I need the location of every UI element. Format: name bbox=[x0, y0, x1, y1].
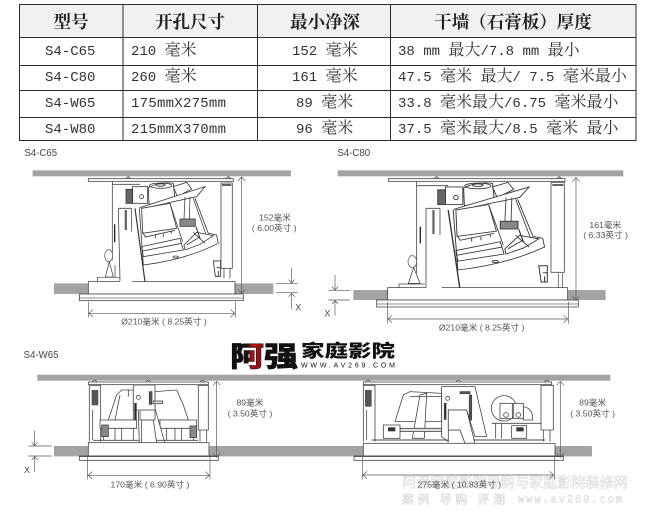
drywall thickness X: X bbox=[24, 465, 30, 475]
drywall thickness X: X bbox=[324, 308, 330, 318]
diagram: S4-C65 bbox=[24, 148, 301, 327]
height label bbox=[583, 219, 628, 240]
height label bbox=[228, 396, 272, 418]
drywall thickness X: X bbox=[295, 302, 301, 312]
height label: 89毫米 bbox=[236, 396, 264, 407]
height dimension bbox=[572, 178, 580, 300]
height label: ( 3.50英寸 ) bbox=[570, 407, 615, 418]
trim and flange bbox=[79, 282, 243, 301]
model label: S4-C65 bbox=[24, 148, 57, 159]
trim and flange bbox=[354, 443, 563, 460]
speaker drivers bbox=[93, 385, 198, 443]
model label: S4-C80 bbox=[337, 148, 370, 159]
drywall sections bbox=[353, 290, 606, 300]
height label: 161毫米 bbox=[589, 219, 622, 230]
table header background bbox=[19, 5, 636, 37]
table headers: 最小净深 bbox=[290, 12, 360, 32]
height label: 89毫米 bbox=[579, 396, 606, 407]
speaker frame bbox=[388, 177, 565, 288]
row: S4-W80 bbox=[45, 115, 619, 138]
drywall sections bbox=[54, 446, 592, 456]
row: S4-W80: 37.5 毫米最大/8.5 毫米 最小 bbox=[398, 115, 619, 138]
diagram: S4-W80 bbox=[354, 380, 628, 508]
speaker driver bbox=[438, 182, 548, 288]
ceiling bar bbox=[338, 170, 623, 176]
width dimension bbox=[362, 457, 554, 479]
model label: S4-W65 bbox=[24, 350, 59, 361]
speaker frame bbox=[88, 380, 208, 442]
row: S4-W65: S4-W65 bbox=[45, 96, 95, 112]
row: S4-W65 bbox=[45, 89, 619, 112]
row: S4-C65: 210 毫米 bbox=[131, 37, 197, 60]
row: S4-W65: 175mmX275mm bbox=[131, 96, 226, 112]
height label: ( 6.33英寸 ) bbox=[583, 229, 628, 240]
watermark: 案例 导购 评测 bbox=[402, 491, 505, 508]
table headers: 开孔尺寸 bbox=[155, 12, 225, 32]
ceiling bar bbox=[33, 170, 291, 176]
row: S4-C65: 38 mm 最大/7.8 mm 最小 bbox=[398, 37, 581, 60]
row: S4-C80: 47.5 毫米 最大/ 7.5 毫米最小 bbox=[398, 63, 628, 86]
row: S4-C65: S4-C65 bbox=[45, 44, 95, 60]
spec table bbox=[19, 4, 636, 141]
row: S4-C65: 152 毫米 bbox=[292, 37, 358, 60]
speaker frame bbox=[363, 380, 553, 442]
ceiling bar bbox=[37, 375, 610, 381]
speaker frame bbox=[88, 177, 233, 281]
height dimension bbox=[213, 381, 220, 457]
diagram: S4-C80 bbox=[324, 148, 628, 333]
drywall sections bbox=[54, 283, 273, 294]
row: S4-W65: 89 毫米 bbox=[296, 89, 353, 112]
logo: site brand: 阿 bbox=[230, 335, 264, 375]
height label: 152毫米 bbox=[259, 212, 291, 223]
row: S4-W80: 215mmX370mm bbox=[131, 122, 226, 138]
speaker driver bbox=[126, 182, 221, 282]
width dimension bbox=[88, 457, 210, 479]
diameter label: Ø210毫米 ( 8.25英寸 ) bbox=[439, 322, 525, 333]
drywall thickness X bbox=[324, 275, 350, 318]
height label: ( 6.00英寸 ) bbox=[252, 222, 297, 233]
diameter label: Ø210毫米 ( 8.25英寸 ) bbox=[121, 316, 207, 327]
height dimension bbox=[238, 177, 245, 293]
row: S4-W80: 96 毫米 bbox=[296, 115, 353, 138]
diameter dimension bbox=[88, 302, 235, 317]
drywall thickness X bbox=[24, 431, 52, 475]
trim and flange bbox=[79, 443, 218, 460]
watermark: www.av269.com bbox=[518, 494, 622, 506]
watermark bbox=[402, 471, 628, 508]
height dimension bbox=[557, 381, 564, 457]
watermark: 阿强家庭影院导购与家庭影院装修网 bbox=[402, 471, 628, 492]
width label: 170毫米 ( 6.90英寸 ) bbox=[111, 479, 190, 490]
drywall thickness X bbox=[276, 268, 301, 312]
diameter dimension bbox=[387, 302, 568, 324]
logo: site brand: WWW.AV269.COM bbox=[301, 362, 395, 370]
row: S4-C80: 260 毫米 bbox=[131, 63, 197, 86]
logo: site brand: 强 bbox=[264, 335, 298, 375]
width label: 275毫米 ( 10.83英寸 ) bbox=[417, 478, 501, 489]
height label bbox=[570, 396, 615, 418]
table headers bbox=[54, 12, 592, 32]
row: S4-W80: S4-W80 bbox=[45, 122, 95, 138]
row: S4-C80: 161 毫米 bbox=[292, 63, 358, 86]
table headers: 型号 bbox=[54, 12, 88, 32]
height label bbox=[252, 212, 297, 233]
row: S4-C80: S4-C80 bbox=[45, 70, 95, 86]
row: S4-W65: 33.8 毫米最大/6.75 毫米最小 bbox=[398, 89, 619, 112]
logo: site brand: 家庭影院 bbox=[301, 338, 396, 363]
row: S4-C80 bbox=[45, 63, 628, 86]
speaker drivers bbox=[372, 387, 545, 443]
table headers: 干墙（石膏板）厚度 bbox=[434, 12, 592, 32]
logo: site brand bbox=[230, 335, 396, 375]
row: S4-C65 bbox=[45, 37, 581, 60]
table grid bbox=[19, 4, 636, 141]
diagram: S4-W65 bbox=[24, 350, 610, 490]
trim and flange bbox=[377, 288, 578, 307]
height label: ( 3.50英寸 ) bbox=[228, 407, 272, 418]
